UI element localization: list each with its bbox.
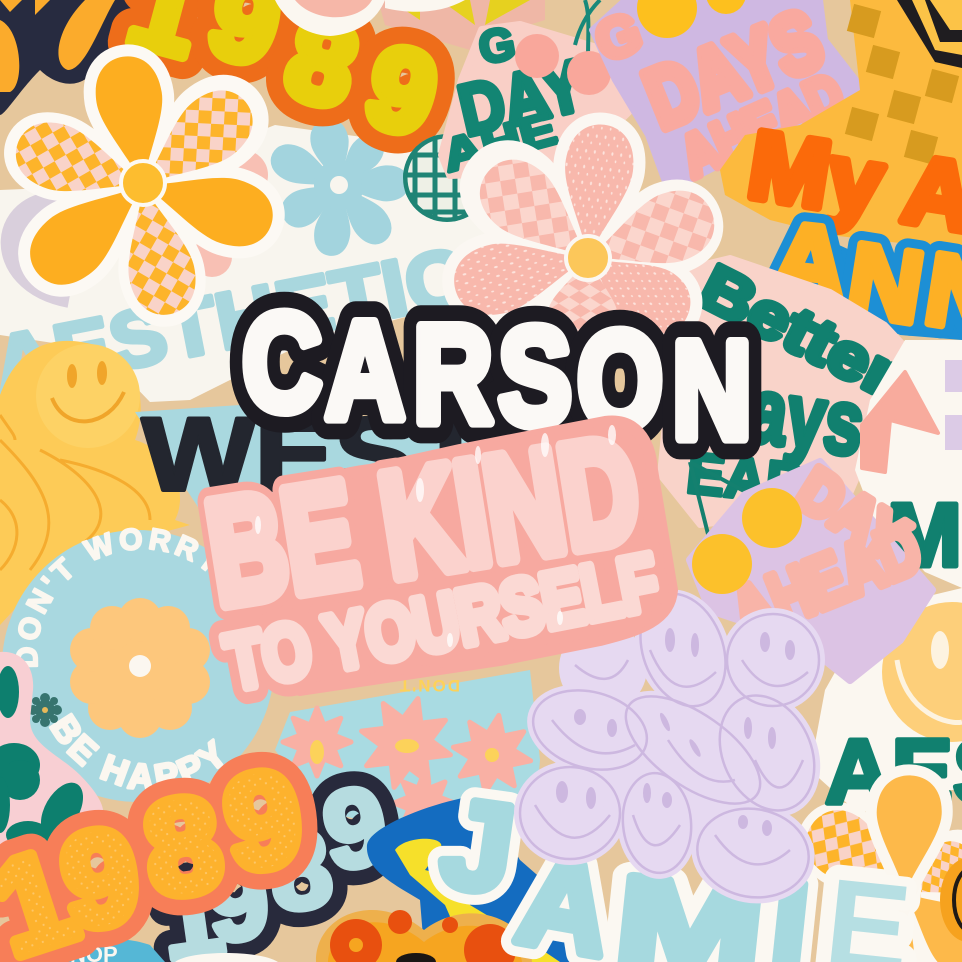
days lettering: ays xyxy=(742,359,870,476)
pink flower fragment xyxy=(862,372,938,472)
sticker: blue yellow swirl xyxy=(367,795,660,962)
sticker: wavy smiley yellow xyxy=(0,341,190,625)
white sticker at top edge xyxy=(275,0,465,36)
orange petals xyxy=(16,52,281,299)
teal digits xyxy=(153,763,394,962)
sticker: good days ahead teal: G xyxy=(475,16,519,74)
sticker: days ahead lilac xyxy=(587,0,860,190)
orange digits: 8 xyxy=(136,769,230,924)
orange digits: 9 xyxy=(53,801,147,956)
green letters xyxy=(0,666,92,849)
cherries xyxy=(515,34,611,95)
carson black outline: O xyxy=(577,303,663,458)
flower center xyxy=(566,236,610,280)
smile line xyxy=(897,660,962,722)
sticker: corner blue xyxy=(0,939,278,962)
sticker: 1989 top xyxy=(117,0,465,161)
checker petals xyxy=(793,797,962,919)
teal digits: 9 xyxy=(316,763,394,894)
pink letters day: DAY xyxy=(785,455,919,575)
orange digits xyxy=(0,743,310,962)
dark outline xyxy=(153,763,394,962)
lilac fragments xyxy=(945,360,962,392)
sticker: right white xyxy=(855,340,962,588)
orange digits: 9 xyxy=(216,743,310,898)
cherries xyxy=(637,0,746,38)
good days ahead lettering: DAY xyxy=(452,46,591,152)
carson white letters: R xyxy=(413,297,493,452)
jamie white outline: J xyxy=(434,773,522,920)
sticker: pink yellow top edge xyxy=(378,0,545,50)
flower center xyxy=(121,161,165,205)
smiley eye xyxy=(931,631,949,669)
carson black outline: R xyxy=(413,297,493,452)
lilac body xyxy=(514,576,840,913)
carson white letters: S xyxy=(498,299,572,454)
1989 digits xyxy=(117,0,449,161)
dotted petals xyxy=(447,121,703,352)
carson black outline xyxy=(242,285,752,468)
carson white letters xyxy=(242,285,752,468)
checker petals xyxy=(465,145,724,343)
carson black outline: A xyxy=(325,293,405,448)
ann blue outline xyxy=(767,201,962,355)
carson white letters: A xyxy=(325,293,405,448)
sticker: dark top-left corner xyxy=(0,0,186,115)
sticker: wavy smiley lilac xyxy=(514,576,840,913)
better lettering: Better xyxy=(689,250,910,411)
aesthetic swirl xyxy=(14,204,70,295)
flowers xyxy=(283,687,537,833)
to yourself backing: TO YOURSELF xyxy=(218,537,665,707)
cherries xyxy=(692,488,802,594)
sticker: 1989 orange xyxy=(0,743,310,962)
sticker: aesthetic xyxy=(0,125,490,410)
ann blue outline: A xyxy=(767,201,852,322)
checker squares xyxy=(845,4,959,164)
white backing xyxy=(447,121,721,352)
coral backing: 9 xyxy=(53,801,147,956)
upside down text: DON'T xyxy=(398,676,460,695)
carson white letters: N xyxy=(672,313,752,468)
carson black outline: C xyxy=(242,285,322,440)
black center xyxy=(396,953,436,962)
teal digits: 8 xyxy=(261,805,339,936)
g lettering: G xyxy=(587,0,649,74)
icon: blue flower xyxy=(266,117,409,257)
small teal flower xyxy=(28,693,62,727)
orange flower xyxy=(70,598,210,738)
white backing xyxy=(796,801,962,962)
sticker: smiley white right xyxy=(810,588,962,823)
coral backing xyxy=(0,743,310,962)
dark outline: 8 xyxy=(261,805,339,936)
orange petals xyxy=(841,868,962,962)
smiley eyes xyxy=(556,628,795,836)
m lettering: M xyxy=(887,486,962,586)
sticker: be kind to yourself xyxy=(197,406,672,707)
be happy text: BE HAPPY xyxy=(48,712,224,790)
sticker: orange heart xyxy=(316,910,532,962)
red flowers xyxy=(330,910,516,962)
sticker: ann blue xyxy=(767,201,962,355)
sticker: good days ahead teal xyxy=(437,0,630,182)
flower: white and yellow checker xyxy=(7,52,281,321)
jamie letters xyxy=(434,773,814,962)
sticker: my a orange xyxy=(720,0,962,252)
icon: disco ball xyxy=(403,134,469,222)
wavy lines xyxy=(0,415,150,570)
flower center xyxy=(889,879,921,911)
flower: pink dotted and checker xyxy=(447,121,724,352)
aesthetic lettering: AESTHETIC xyxy=(0,231,474,410)
sticker: jamie teal xyxy=(434,773,917,962)
black corner sticker xyxy=(897,0,962,68)
sticker: carson name xyxy=(242,285,752,468)
cherry stems xyxy=(690,462,770,550)
ann letters: A xyxy=(767,201,852,322)
sticker: good days ahead teal: AHE xyxy=(437,102,562,182)
smiley xyxy=(882,602,962,742)
sticker: days ahead lilac right xyxy=(690,455,932,680)
carson black outline: N xyxy=(672,313,752,468)
white backing xyxy=(8,52,281,321)
coral backing: 8 xyxy=(136,769,230,924)
smiley badge edge xyxy=(940,858,962,942)
be kind lettering: BE KIND xyxy=(197,406,650,637)
smiley rings and smiles xyxy=(520,582,832,906)
orange letters xyxy=(0,0,145,92)
1989 orange backing: 9 xyxy=(354,21,449,161)
flower: yellow bottom right xyxy=(793,797,962,962)
cherry stems xyxy=(575,0,600,60)
jamie white outline xyxy=(434,773,917,962)
letter highlights xyxy=(255,425,616,647)
sticker: green bubble left xyxy=(0,652,103,860)
checker petals xyxy=(7,76,266,321)
1989 digits: 9 xyxy=(354,21,449,161)
ann blue outline: N xyxy=(840,221,931,345)
ann letters: N xyxy=(840,221,931,345)
smiley face xyxy=(36,344,140,448)
sticker: 1989 dark xyxy=(153,763,394,962)
sticker: flowers light blue xyxy=(275,670,540,835)
ahead lettering: EAD xyxy=(684,440,810,517)
pink blobs behind flower xyxy=(192,150,268,277)
dark outline: 9 xyxy=(316,763,394,894)
sticker: west dark on blue xyxy=(135,397,490,513)
1989 orange backing xyxy=(117,0,449,161)
be kind backing: BE KIND xyxy=(197,406,650,637)
carson white letters: O xyxy=(577,303,663,458)
ahead lettering: AHEAD xyxy=(671,61,853,190)
carson white letters: C xyxy=(242,285,322,440)
sticker: don't worry be happy xyxy=(2,527,272,802)
coral backing: 9 xyxy=(216,743,310,898)
sticker: better days green xyxy=(660,250,918,550)
carson black outline: S xyxy=(498,299,572,454)
flower bottom right top petal xyxy=(873,774,944,895)
don't worry text: DON'T WORRY xyxy=(16,527,208,668)
jamie letters: J xyxy=(434,773,522,920)
west lettering: WEST xyxy=(142,397,487,513)
to yourself lettering: TO YOURSELF xyxy=(218,537,665,707)
ann letters xyxy=(767,201,962,355)
